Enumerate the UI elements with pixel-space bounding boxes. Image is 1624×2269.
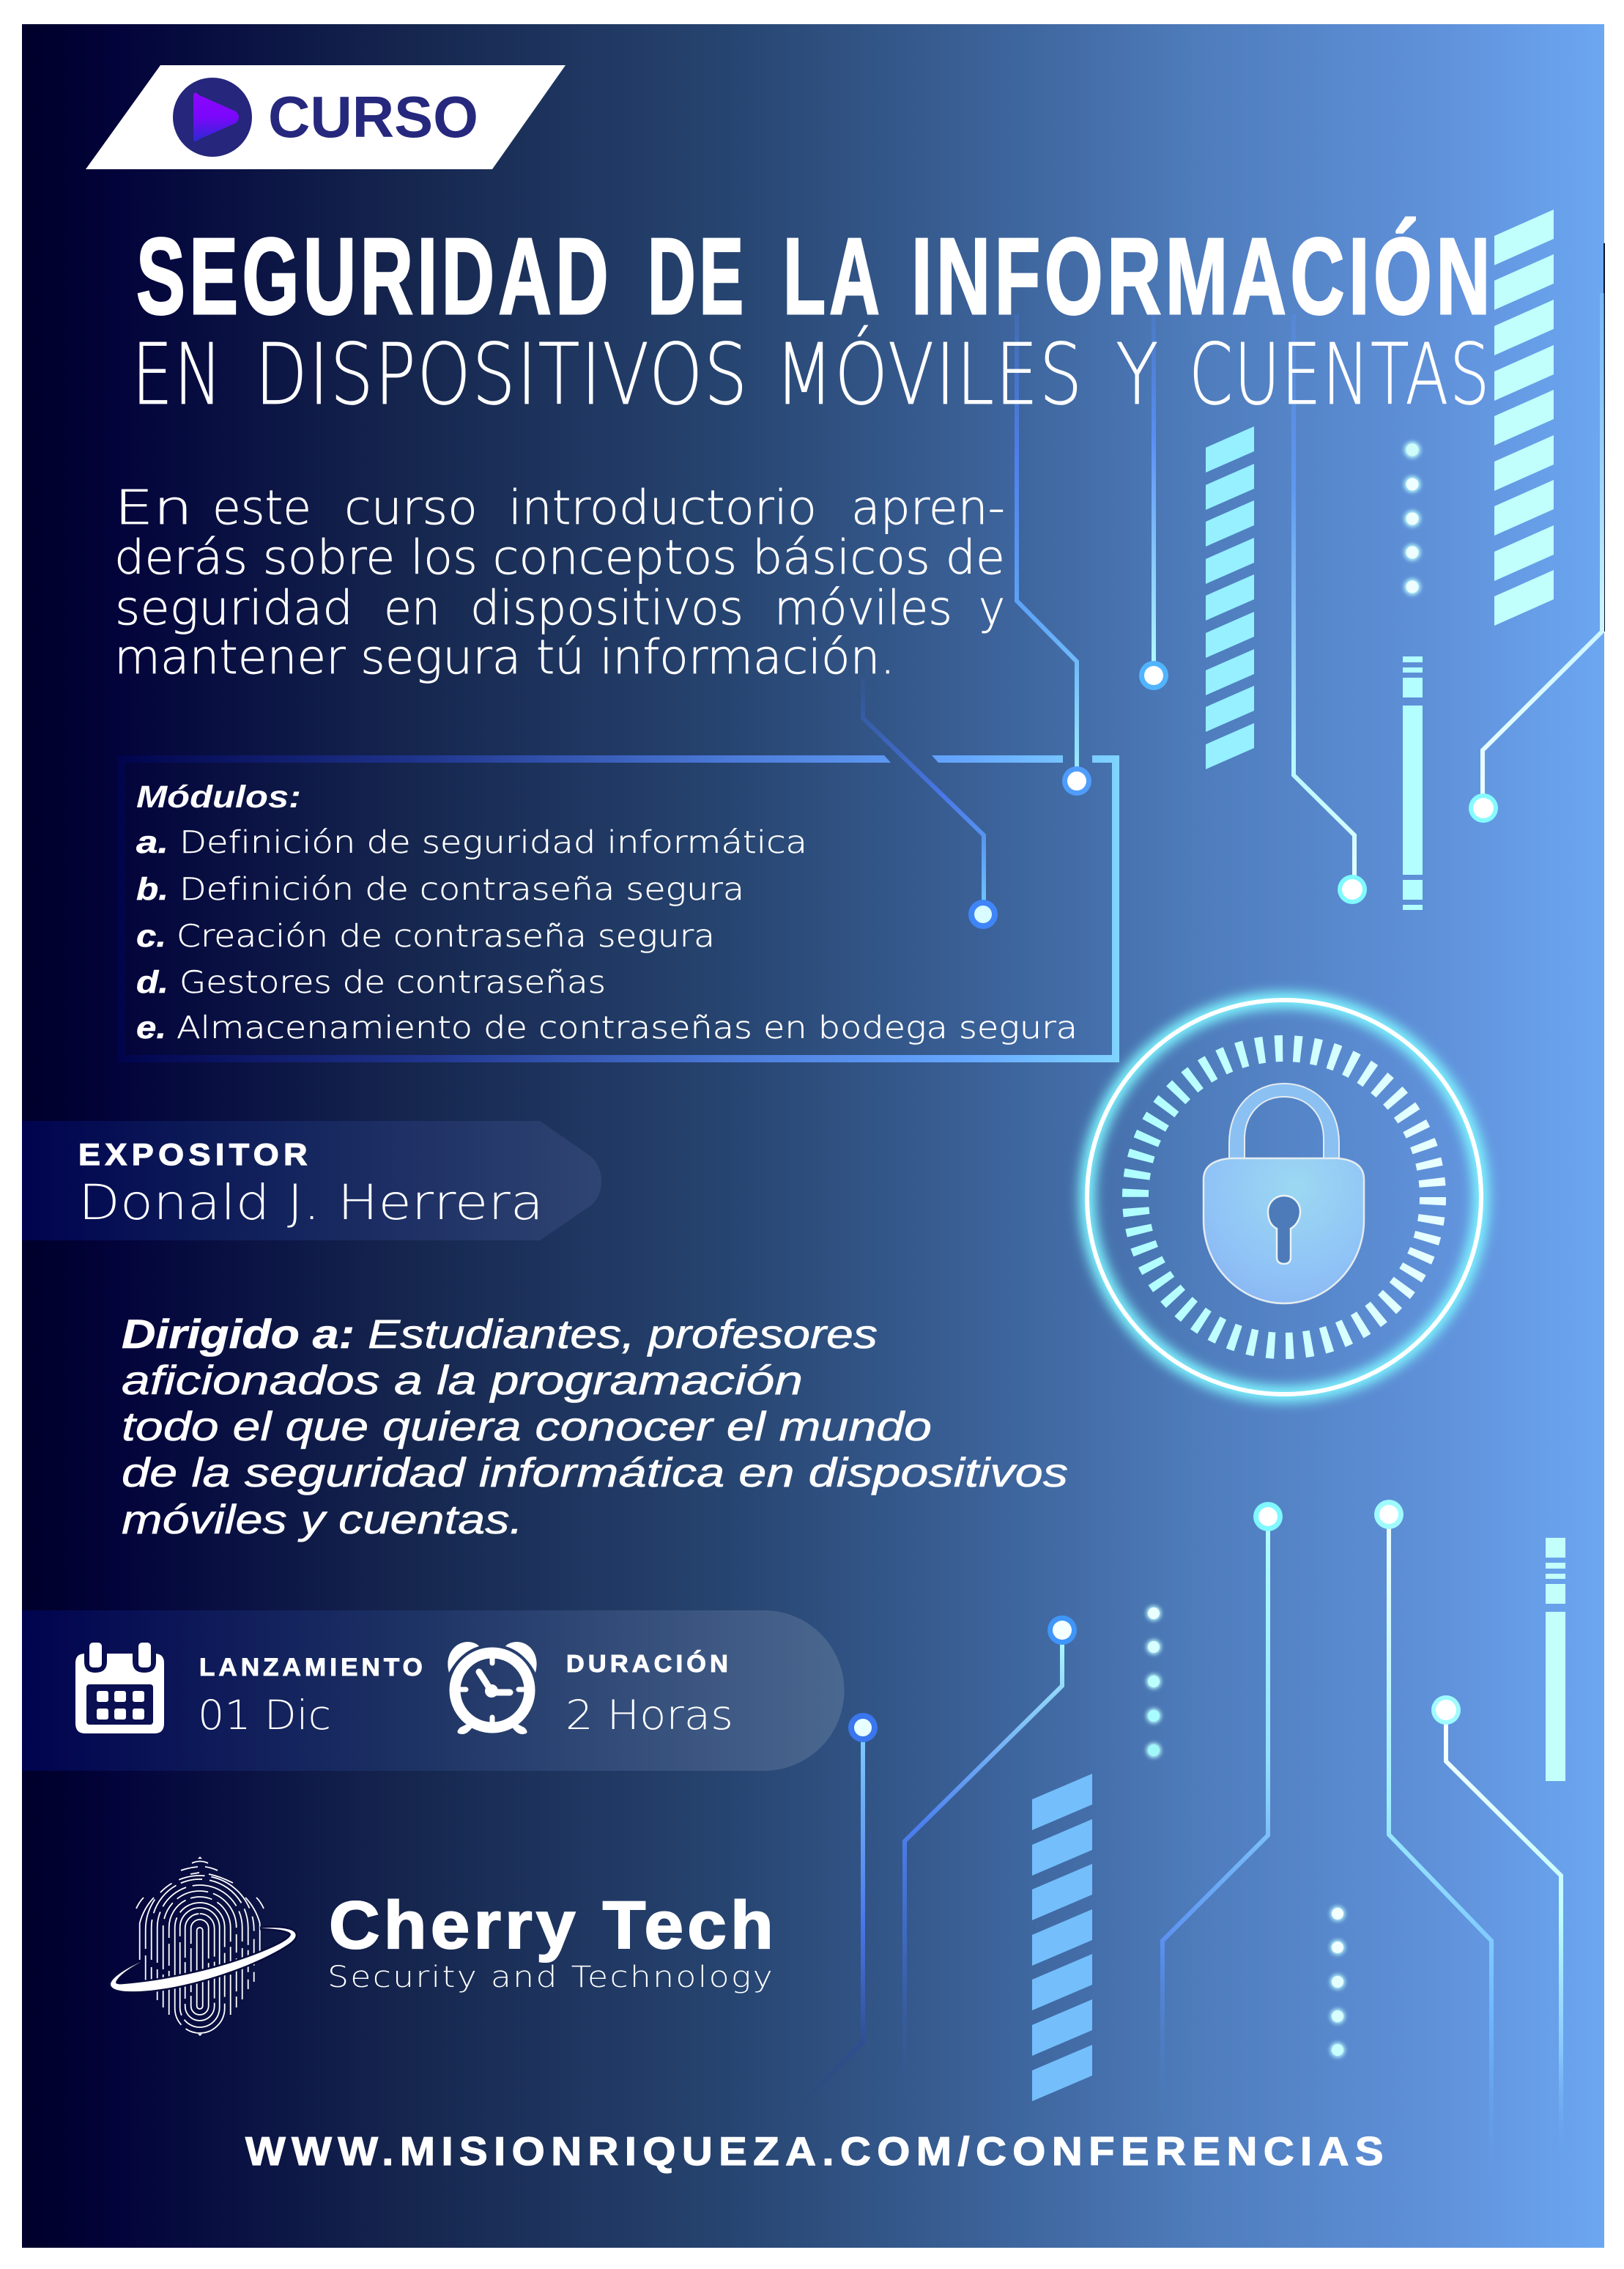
logo: wordmark: Security and Technology (327, 1961, 774, 1994)
value: horas: 2 Horas (566, 1692, 733, 1739)
intro paragraph: En (114, 481, 193, 536)
stripes: large upper right (1494, 210, 1554, 626)
audience text block: de la seguridad informática en dispositivos (122, 1449, 1068, 1495)
intro paragraph: este (212, 481, 311, 536)
logo: wordmark: Cherry Tech (329, 1888, 777, 1963)
dots: lower column 2 (1330, 1906, 1345, 2057)
panel: modules (117, 755, 1119, 1062)
dots: upper column (1404, 442, 1420, 595)
icon: alarm clock (448, 1642, 537, 1734)
banner: speaker: Donald J. Herrera (78, 1174, 544, 1231)
intro paragraph: apren- (851, 481, 1005, 536)
title line 2: EN (132, 326, 223, 424)
title line 2: Y (1116, 326, 1160, 424)
badge: curso: CURSO (268, 84, 478, 149)
module d: d. (136, 965, 168, 1000)
stripes: lower (1032, 1774, 1092, 2101)
title line 2 (132, 325, 1491, 424)
module e: e. (136, 1010, 166, 1045)
audience text block: Estudiantes, profesores (368, 1311, 878, 1357)
value: fecha: 01 Dic (198, 1692, 331, 1739)
icon: calendar (75, 1643, 164, 1733)
banner: speaker: EXPOSITOR (78, 1137, 312, 1171)
intro paragraph: curso (344, 481, 478, 536)
intro paragraph: dispositivos (470, 582, 744, 636)
module b: Definición de contraseña segura (179, 871, 744, 907)
title line 1: SEGURIDAD (136, 216, 612, 337)
modules heading: Módulos: (136, 780, 301, 815)
pill: schedule (22, 1610, 844, 1771)
title line 2: MÓVILES (775, 325, 1083, 424)
title line 2: CUENTAS (1189, 326, 1491, 424)
intro paragraph: y (979, 582, 1005, 636)
edge line (1603, 243, 1605, 632)
stripes: medium upper (1206, 426, 1254, 769)
module a: a. (136, 825, 168, 860)
segmented bar: lower (1546, 1538, 1565, 1781)
audience text block (122, 1311, 1068, 1542)
segmented bar: upper (1403, 656, 1423, 910)
title line 1: LA (783, 216, 883, 337)
circuit traces: upper (1017, 293, 1602, 889)
audience text block: móviles y cuentas. (122, 1496, 523, 1542)
nodes: upper (968, 661, 1498, 929)
logo: wordmark (327, 1888, 777, 1994)
intro paragraph: móviles (774, 582, 952, 636)
glow ring (1087, 1000, 1481, 1394)
website url: WWW.MISIONRIQUEZA.COM/CONFERENCIAS (245, 2128, 1390, 2174)
module b: b. (136, 872, 168, 907)
badge: curso (86, 65, 566, 169)
logo: fingerprint (111, 1857, 296, 2036)
title line 1 (136, 216, 1494, 337)
title (132, 216, 1494, 424)
padlock body (1204, 1158, 1364, 1303)
tick ring (1135, 1048, 1433, 1346)
circuit traces: lower (784, 1514, 1561, 2224)
intro paragraph: en (384, 582, 440, 636)
title line 1: DE (648, 216, 747, 337)
nodes: lower (848, 1500, 1461, 1742)
circuit trace: over modules panel (863, 678, 984, 914)
padlock shackle (1229, 1084, 1339, 1158)
audience text block: todo el que quiera conocer el mundo (122, 1403, 932, 1449)
module d: Gestores de contraseñas (179, 964, 606, 1000)
module c: Creación de contraseña segura (177, 918, 715, 954)
intro paragraph: seguridad (115, 582, 353, 636)
intro paragraph: derás sobre los conceptos básicos de (114, 531, 1005, 585)
banner: speaker (22, 1121, 601, 1240)
label: duracion: DURACIÓN (566, 1650, 732, 1677)
title line 2: DISPOSITIVOS (255, 326, 749, 424)
intro paragraph: introductorio (508, 481, 817, 536)
audience text block: aficionados a la programación (122, 1357, 803, 1403)
module e: Almacenamiento de contraseñas en bodega segura (177, 1010, 1078, 1045)
orbit swoosh (111, 1928, 296, 1991)
label: lanzamiento: LANZAMIENTO (199, 1654, 426, 1681)
intro paragraph: mantener segura tú información. (114, 631, 895, 685)
dots: lower column 1 (1146, 1606, 1161, 1758)
module a: Definición de seguridad informática (179, 824, 807, 860)
lock emblem (1087, 1000, 1481, 1394)
keyhole (1268, 1196, 1300, 1264)
intro paragraph (114, 481, 1005, 685)
module c: c. (136, 919, 166, 954)
audience text block: Dirigido a: (122, 1311, 355, 1357)
